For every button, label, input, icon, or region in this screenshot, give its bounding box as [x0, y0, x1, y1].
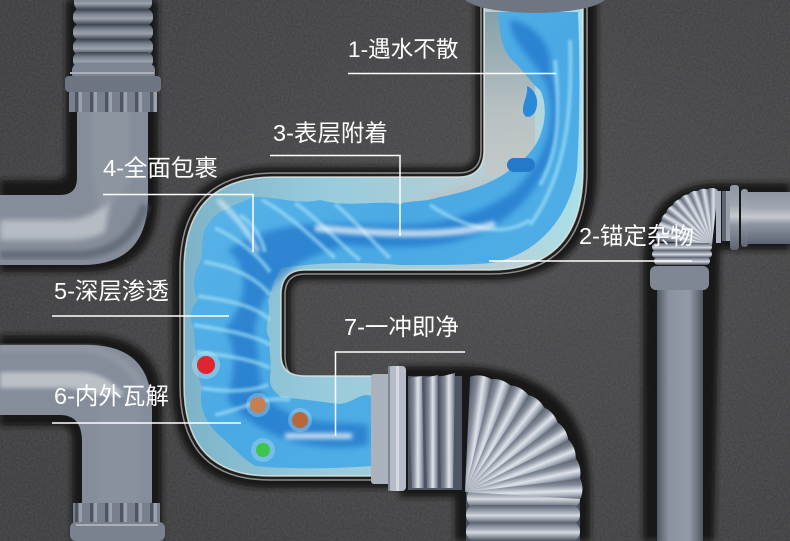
water drips [523, 86, 537, 117]
debris: brown ball 2 [288, 408, 312, 432]
callout 3 [270, 120, 400, 236]
hose collar [371, 366, 406, 491]
top collar [465, 0, 605, 13]
debris: brown ball [246, 393, 270, 417]
pipe: top left elbow [0, 0, 161, 265]
corrugated bend [652, 188, 730, 265]
callout 5: 5-深层渗透 [54, 278, 169, 304]
callout 7 [336, 314, 465, 436]
white highlights [218, 200, 495, 436]
bottom right corrugated hose [371, 366, 583, 541]
pipe: bottom left elbow [0, 345, 165, 541]
callout 3: 3-表层附着 [273, 120, 388, 146]
gel twists [194, 40, 571, 415]
debris: red ball [192, 351, 220, 379]
callout 6: 6-内外瓦解 [54, 383, 169, 409]
callout 1: 1-遇水不散 [348, 37, 458, 62]
debris: green ball [251, 438, 275, 462]
callout 2: 2-锚定杂物 [579, 223, 694, 249]
blue cleaning gel [191, 12, 579, 468]
callout 4 [103, 155, 253, 252]
collar [65, 64, 161, 112]
corrugated hose [73, 0, 153, 68]
callout 4: 4-全面包裹 [103, 155, 218, 181]
S-trap glass tube [180, 0, 605, 480]
collars [650, 266, 709, 290]
callout 7: 7-一冲即净 [344, 314, 459, 340]
collar [70, 503, 165, 541]
pipe: right elbow [650, 185, 790, 541]
